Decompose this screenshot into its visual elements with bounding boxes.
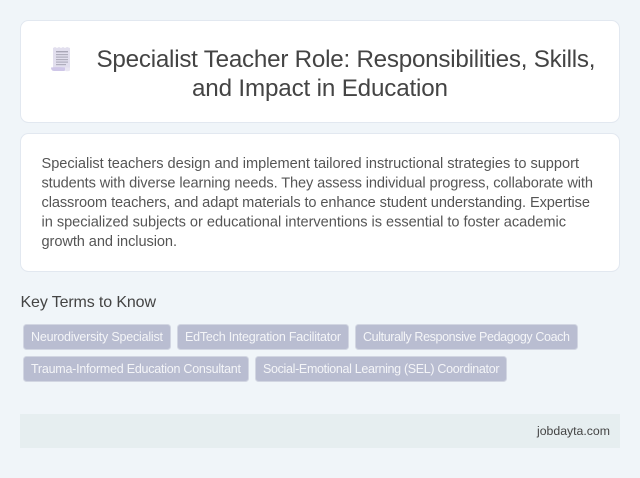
heading: and Impact in Education (192, 75, 448, 102)
tag: Neurodiversity Specialist (24, 324, 170, 350)
footer source text: jobdayta.com (536, 424, 610, 438)
tag: Social-Emotional Learning (SEL) Coordinator: Social-Emotional Learning (SEL) Coordinator (263, 362, 500, 376)
tag: Trauma-Informed Education Consultant: Trauma-Informed Education Consultant (31, 362, 242, 376)
heading (96, 46, 596, 102)
text block: description: Specialist teachers design and implement tailored instructional strategies to support (42, 156, 579, 172)
text block: description: in specialized subjects or educational interventions is essential to foster academic (42, 214, 566, 230)
text block: description: students with diverse learning needs. They assess individual progress, collaborate with (42, 176, 593, 192)
tag: Culturally Responsive Pedagogy Coach: Culturally Responsive Pedagogy Coach (363, 330, 570, 344)
tag: EdTech Integration Facilitator: EdTech Integration Facilitator (185, 330, 341, 344)
panel: description (20, 134, 620, 272)
text block: description: classroom teachers, and adapt materials to enhance student understanding. Expertise (42, 195, 590, 211)
heading: key terms: Key Terms to Know (20, 294, 156, 311)
text block: description: growth and inclusion. (42, 234, 177, 250)
tag: Social-Emotional Learning (SEL) Coordinator (256, 356, 506, 382)
heading: Specialist Teacher Role: Responsibilities, Skills, (96, 46, 596, 73)
text block: description (42, 156, 593, 250)
tag: Trauma-Informed Education Consultant (24, 356, 248, 382)
tag: EdTech Integration Facilitator (178, 324, 348, 350)
panel: title header (20, 20, 620, 122)
footer bar (20, 414, 620, 448)
tag: Neurodiversity Specialist: Neurodiversity Specialist (31, 330, 164, 344)
tag: Culturally Responsive Pedagogy Coach (356, 324, 578, 350)
icon: document scroll (51, 47, 70, 71)
